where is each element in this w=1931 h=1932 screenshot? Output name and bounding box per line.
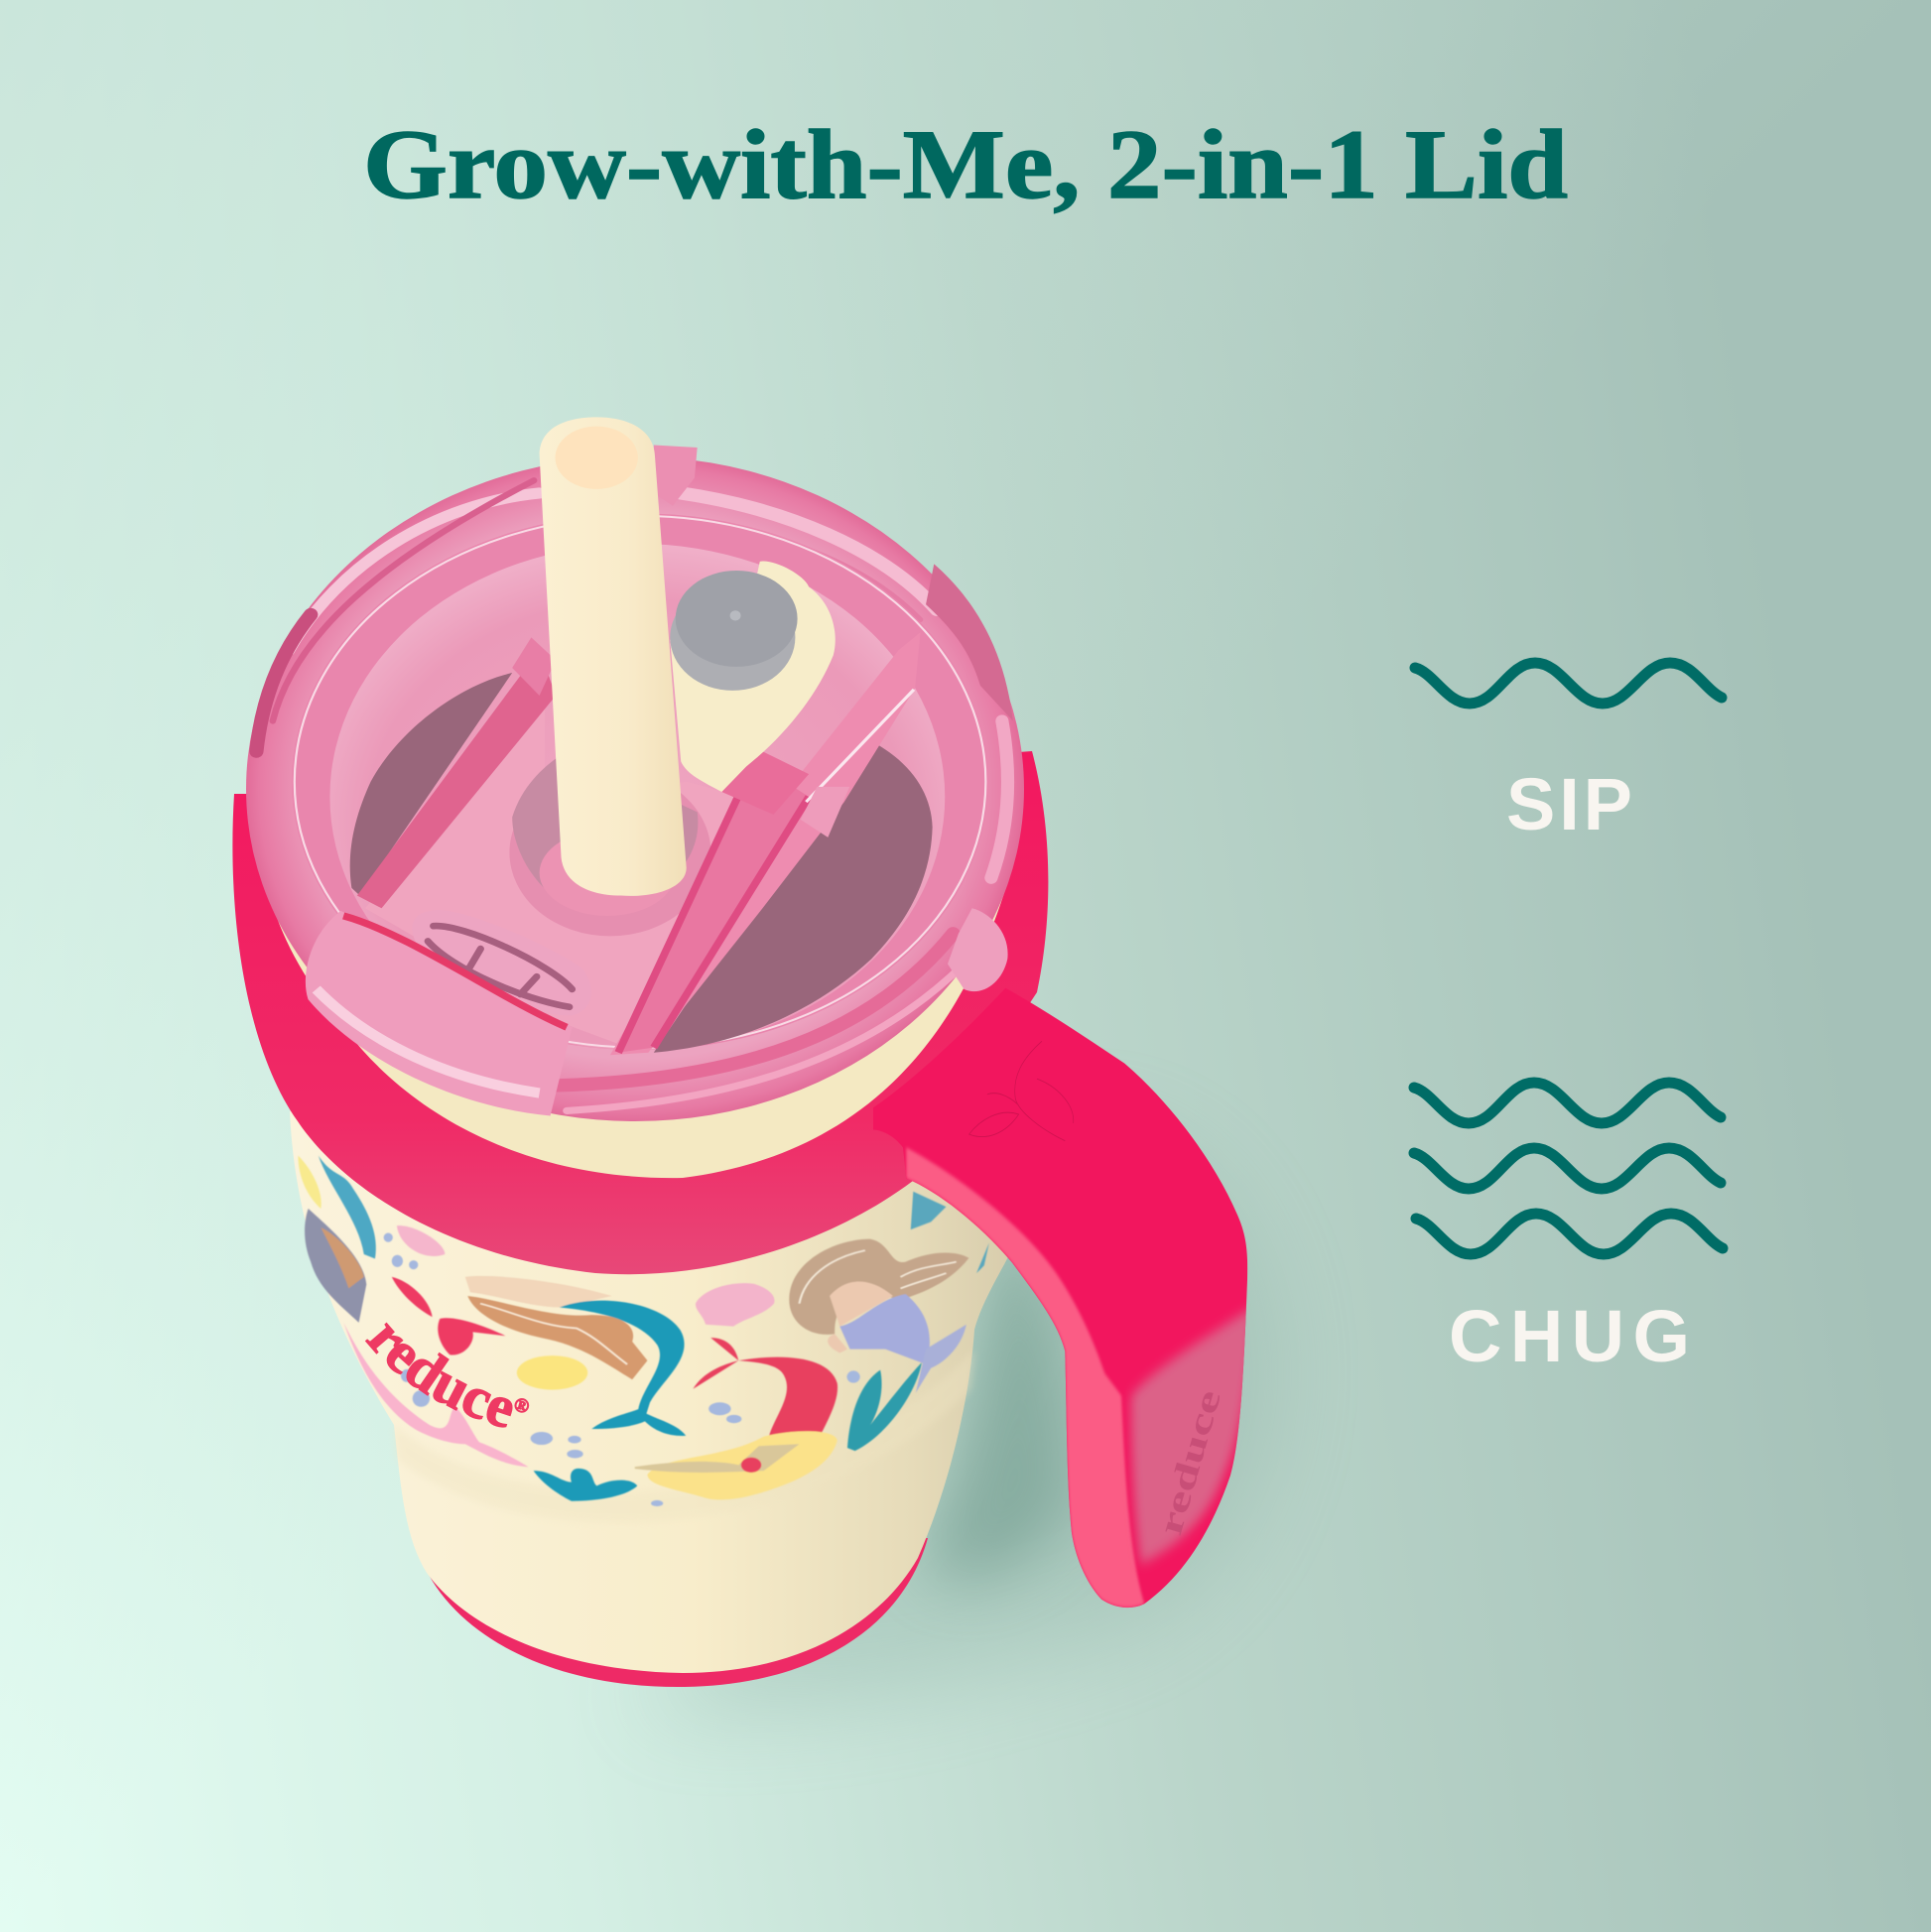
vent pill — [412, 910, 591, 1016]
straw opening — [556, 427, 638, 489]
left rail — [357, 650, 556, 908]
front tab red edge — [343, 916, 567, 1027]
slider bar — [610, 632, 921, 1055]
red mermaid torso — [635, 1444, 800, 1473]
brand wordmark: ® — [514, 1398, 530, 1413]
hair tan — [467, 1296, 647, 1379]
red fins — [693, 1338, 738, 1389]
red bow — [741, 1458, 761, 1473]
slider dark edges — [618, 761, 809, 1053]
front tab — [306, 911, 573, 1115]
hand seaweed — [911, 1192, 989, 1273]
teal seaweed — [847, 1362, 922, 1451]
well — [329, 544, 945, 1050]
handle muted lower face — [1131, 1307, 1253, 1564]
pink base — [417, 1538, 928, 1687]
teal coral — [534, 1469, 637, 1501]
rim highlights — [256, 480, 1008, 1110]
tumbler — [232, 417, 1248, 1687]
cream neck — [253, 834, 1022, 1181]
waist shading — [394, 1350, 974, 1523]
straw well dark — [512, 751, 698, 903]
hair highlight — [480, 1304, 627, 1364]
yellow shell — [517, 1355, 587, 1390]
slider highlight — [806, 690, 914, 802]
bubbles — [384, 1233, 860, 1506]
blue tail — [560, 1301, 686, 1436]
slider glass strip — [618, 761, 809, 1053]
slider pin — [801, 787, 849, 837]
pink shell upper — [397, 1225, 445, 1256]
slider block — [721, 749, 809, 815]
label: SIP: SIP — [1506, 763, 1632, 845]
lid — [246, 417, 1024, 1121]
handle embossed wordmark: reduce — [1152, 1386, 1228, 1539]
lid outer rim — [246, 456, 1024, 1121]
side lug — [948, 908, 1008, 991]
right clip arc — [926, 564, 1013, 721]
cream tab — [670, 562, 836, 792]
handle silhouette — [866, 974, 1263, 1621]
straw tube — [540, 417, 687, 896]
mermaid left edge — [305, 1209, 366, 1323]
mermaid artwork — [298, 1155, 989, 1506]
top notch — [654, 445, 698, 506]
grey valve side — [670, 584, 795, 691]
purple tail — [839, 1294, 930, 1364]
purple fins — [916, 1325, 966, 1393]
chug indicator — [1414, 1083, 1723, 1377]
label: CHUG: CHUG — [1449, 1295, 1690, 1377]
handle — [866, 974, 1263, 1621]
inner ring — [292, 513, 988, 1050]
yellow sliver — [298, 1155, 322, 1209]
logo leaves — [392, 1277, 506, 1355]
purple mermaid skin — [828, 1282, 893, 1352]
yellow hair — [647, 1431, 837, 1499]
title: Grow-with-Me, 2-in-1 Lid — [363, 109, 1568, 219]
pink shell fan — [696, 1283, 774, 1327]
icon: single wave — [1415, 663, 1722, 704]
skin of blue mermaid — [465, 1276, 612, 1308]
cup drop shadow — [635, 1131, 1272, 1709]
front tab highlight — [317, 989, 540, 1094]
center plate — [365, 696, 763, 1045]
ring highlight — [295, 516, 985, 1048]
straw collar — [540, 830, 676, 916]
purple mermaid hair — [789, 1239, 968, 1335]
purple hair strands — [800, 1250, 957, 1304]
seaweed left — [319, 1155, 376, 1259]
straw well rings — [509, 769, 710, 936]
pink tail fading — [343, 1323, 529, 1467]
lid in zoom coordinates — [256, 417, 1013, 1115]
sip indicator — [1415, 663, 1722, 845]
left rail cap — [512, 637, 556, 696]
handle inner face — [906, 1147, 1144, 1608]
cup body — [290, 1111, 1022, 1673]
icon: triple wave — [1414, 1083, 1723, 1254]
silicone band — [232, 751, 1048, 1274]
liquid right — [654, 741, 933, 1053]
leaf emboss logo — [969, 1041, 1074, 1141]
liquid left — [350, 673, 512, 896]
grey valve top — [676, 571, 798, 667]
red tail — [738, 1357, 837, 1448]
mermaid left skin — [321, 1227, 364, 1288]
brand wordmark: reduce — [365, 1322, 513, 1428]
valve dot — [730, 610, 741, 621]
